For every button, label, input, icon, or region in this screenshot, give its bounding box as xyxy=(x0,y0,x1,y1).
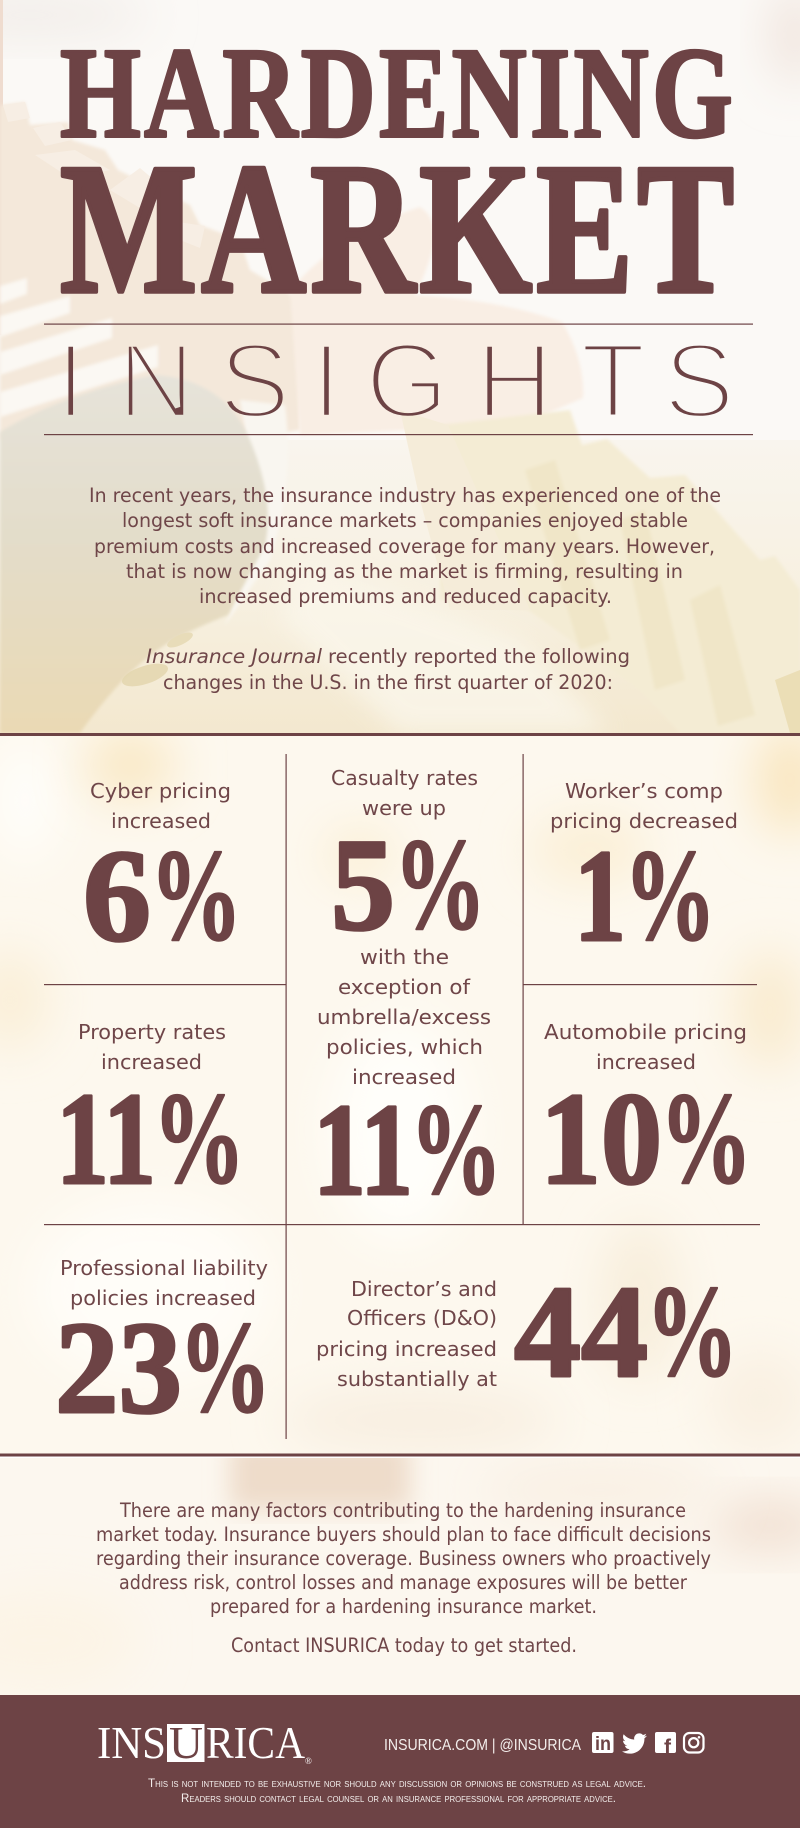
intro text: that is now changing as the market is firming, resulting in xyxy=(126,560,683,583)
stat grid lines xyxy=(44,754,760,1439)
logo: INSURICA: ® xyxy=(305,1756,312,1766)
stat: automobile pricing: increased xyxy=(596,1050,696,1074)
stat: casualty rates: with the xyxy=(360,945,449,969)
icon: facebook: f xyxy=(664,1736,672,1759)
intro text: increased premiums and reduced capacity. xyxy=(199,585,612,608)
stat: automobile pricing: % xyxy=(660,1066,752,1211)
panel background: closing xyxy=(0,1440,800,1695)
stat: directors and officers: 44 xyxy=(514,1258,648,1405)
intro text: In recent years, the insurance industry has experienced one of the xyxy=(89,484,721,507)
source sentence: recently reported the following xyxy=(328,645,630,668)
stat: casualty rates: % xyxy=(410,1077,502,1222)
icon: linkedin: in xyxy=(595,1734,611,1755)
intro text xyxy=(89,484,721,608)
photo background: hand toppling dominoes xyxy=(0,0,800,733)
stat: casualty rates: umbrella/excess xyxy=(317,1005,491,1029)
source sentence: Insurance Journal xyxy=(146,645,323,668)
stat: automobile pricing: 10 xyxy=(540,1065,662,1212)
logo: INSURICA: U xyxy=(169,1717,203,1768)
stat: property rates: 11 xyxy=(56,1065,156,1212)
closing text: prepared for a hardening insurance market. xyxy=(210,1595,597,1618)
stat: casualty rates: Casualty rates xyxy=(331,766,478,790)
stat: professional liability: policies increased xyxy=(70,1286,256,1310)
stat: cyber pricing xyxy=(83,779,242,969)
call to action: Contact INSURICA today to get started. xyxy=(231,1634,577,1657)
closing text: market today. Insurance buyers should plan to face difficult decisions xyxy=(96,1523,711,1546)
logo: INSURICA: INS xyxy=(97,1717,166,1768)
stat: property rates: % xyxy=(153,1066,245,1211)
disclaimer: This is not intended to be exhaustive nor should any discussion or opinions be construed as legal advice. xyxy=(148,1776,646,1790)
stat: directors and officers xyxy=(316,1258,738,1405)
intro text: longest soft insurance markets – companies enjoyed stable xyxy=(122,509,688,532)
stat: directors and officers: substantially at xyxy=(337,1367,497,1391)
closing text: address risk, control losses and manage exposures will be better xyxy=(119,1571,688,1594)
stat: directors and officers: Officers (D&O) xyxy=(347,1306,497,1330)
stat: casualty rates: increased xyxy=(352,1065,456,1089)
stat: professional liability: Professional liability xyxy=(60,1256,268,1280)
stat: worker's comp: 1 xyxy=(574,822,626,969)
stat: cyber pricing: 6 xyxy=(83,822,151,969)
source sentence xyxy=(146,645,630,694)
closing text: There are many factors contributing to the hardening insurance xyxy=(119,1499,686,1522)
stat: casualty rates: % xyxy=(394,812,486,957)
stat: automobile pricing xyxy=(540,1020,752,1212)
stat: cyber pricing: increased xyxy=(111,809,211,833)
closing text: regarding their insurance coverage. Business owners who proactively xyxy=(96,1547,711,1570)
stat: worker's comp: % xyxy=(624,823,716,968)
stat: worker's comp: pricing decreased xyxy=(550,809,738,833)
section rule top xyxy=(0,733,800,736)
icon: twitter xyxy=(622,1733,647,1754)
stat: casualty rates: policies, which xyxy=(326,1035,483,1059)
stat: professional liability: 23 xyxy=(55,1294,182,1441)
disclaimer: Readers should contact legal counsel or an insurance professional for appropriate advice. xyxy=(181,1791,616,1805)
stat: casualty rates: exception of xyxy=(338,975,471,999)
section rule bottom xyxy=(0,1454,800,1456)
stat: casualty rates xyxy=(313,766,502,1223)
stat: professional liability: % xyxy=(179,1295,271,1440)
stat: property rates: Property rates xyxy=(78,1020,226,1044)
stat: cyber pricing: Cyber pricing xyxy=(90,779,231,803)
footer band xyxy=(0,1695,800,1828)
closing text xyxy=(96,1499,711,1618)
icon: facebook xyxy=(655,1732,676,1759)
stat: property rates: increased xyxy=(101,1050,202,1074)
stat: property rates xyxy=(56,1020,245,1212)
icon: instagram xyxy=(684,1733,704,1752)
intro text: premium costs and increased coverage for many years. However, xyxy=(94,535,715,558)
disclaimer xyxy=(148,1776,646,1805)
logo: INSURICA: RICA xyxy=(206,1717,305,1768)
stat: casualty rates: 11 xyxy=(313,1076,413,1223)
panel background: statistics xyxy=(0,725,800,1454)
heading: INSIGHTS with rules xyxy=(44,324,753,436)
stat: worker's comp: Worker’s comp xyxy=(565,779,723,803)
source sentence: changes in the U.S. in the first quarter of 2020: xyxy=(163,671,613,694)
title xyxy=(60,22,738,332)
logo: INSURICA xyxy=(97,1717,312,1768)
stat: directors and officers: pricing increased xyxy=(316,1337,497,1361)
stat: automobile pricing: Automobile pricing xyxy=(544,1020,747,1044)
stat: directors and officers: Director’s and xyxy=(351,1277,497,1301)
stat: professional liability xyxy=(55,1256,271,1441)
website and handle: INSURICA.COM | @INSURICA xyxy=(384,1737,582,1754)
stat: casualty rates: were up xyxy=(362,796,446,820)
stat: cyber pricing: % xyxy=(150,823,242,968)
stat: casualty rates: 5 xyxy=(331,811,395,958)
stat: worker's comp xyxy=(550,779,738,969)
stat: directors and officers: % xyxy=(646,1259,738,1404)
